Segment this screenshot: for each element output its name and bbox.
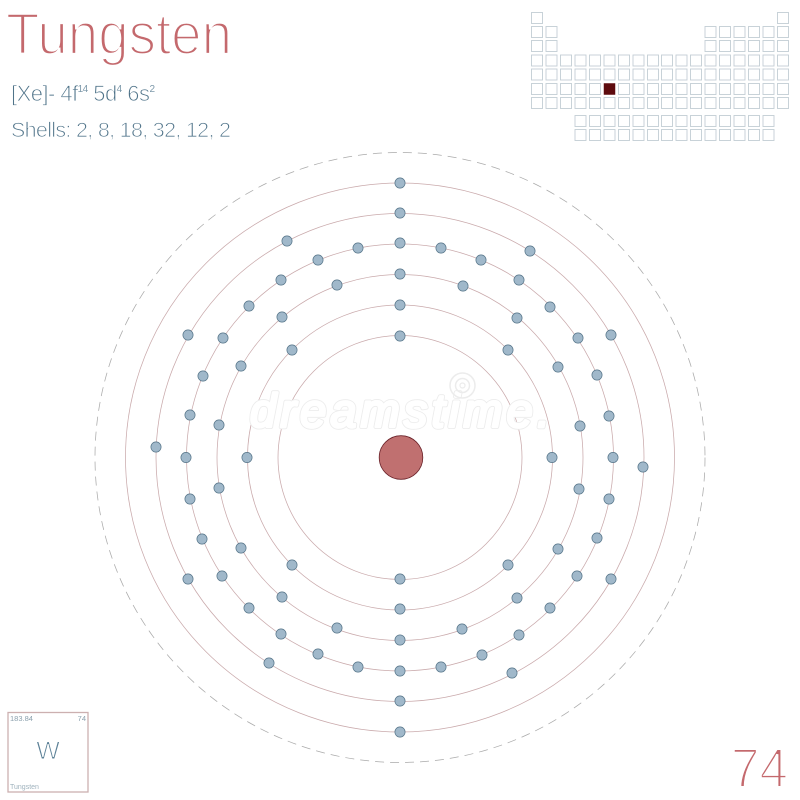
atomic number small: 74 [78,714,86,723]
periodic table locator [532,12,788,140]
electron configuration: [Xe]- 4f [11,81,78,106]
watermark: dreamstime. [250,384,550,437]
title: Tungsten [6,2,232,67]
watermark: dreamstime. [250,384,550,437]
electrons: shell 6 [395,178,405,737]
electron configuration: 14 [78,84,89,95]
atomic mass: 183.84 [10,714,33,723]
element card [8,712,88,792]
electrons: shell 2 [242,300,557,614]
shell counts: Shells: 2, 8, 18, 32, 12, 2 [11,118,231,142]
outer dashed boundary [95,152,705,762]
nucleus [379,436,423,479]
electron configuration: 5d [88,81,117,106]
element symbol: W [36,737,60,765]
electron shell rings [126,183,674,732]
electron configuration: 6s [122,81,150,106]
element name: Tungsten [10,784,39,791]
electrons: shell 3 [214,269,585,645]
atomic number: 74 [731,736,788,799]
electron configuration: 4 [117,84,123,95]
electrons: shell 1 [395,331,405,584]
electrons: shell 5 [151,208,648,706]
electron configuration: 2 [149,84,155,95]
electrons: shell 4 [181,238,618,676]
